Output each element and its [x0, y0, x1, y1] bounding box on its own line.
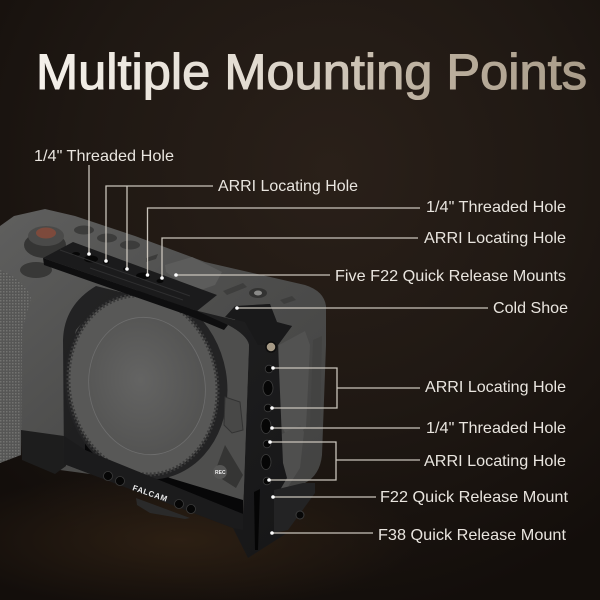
label: five F22 quick release mounts: Five F22 Quick Release Mounts — [335, 268, 566, 285]
hand grip — [0, 270, 31, 463]
REC button: REC — [215, 470, 226, 476]
label: F38 quick release mount: F38 Quick Release Mount — [378, 527, 567, 544]
side foot mount — [274, 483, 315, 533]
label: ARRI locating hole, top: ARRI Locating Hole — [218, 178, 358, 195]
bottom bar of cage — [64, 436, 243, 530]
label: ARRI locating hole, upper right: ARRI Locating Hole — [424, 230, 566, 247]
lens mount ring — [50, 277, 242, 493]
camera with cage — [0, 209, 326, 558]
FALCAM logo: FALCAM — [131, 483, 169, 504]
base plate — [21, 430, 66, 474]
lens cap gear — [54, 284, 232, 486]
side rail slots — [254, 489, 260, 550]
release tab — [224, 397, 243, 433]
bottom tab — [136, 498, 190, 519]
leader dots — [87, 252, 275, 535]
label: ARRI locating hole, side lower: ARRI Locating Hole — [424, 453, 566, 470]
label: 1/4 threaded hole, upper right: 1/4" Threaded Hole — [426, 199, 566, 216]
cage window backing — [74, 300, 249, 514]
cold shoe block — [225, 304, 292, 345]
leader lines — [89, 165, 488, 533]
side rail holes — [261, 365, 273, 485]
label: cold shoe: Cold Shoe — [493, 300, 568, 317]
camera top buttons — [74, 226, 158, 262]
side door panels — [278, 331, 310, 438]
title: Multiple Mounting Points — [36, 44, 587, 100]
camera top dial — [20, 226, 66, 278]
top rail plate — [43, 242, 228, 330]
hot shoe area — [165, 257, 222, 292]
label: F22 quick release mount: F22 Quick Release Mount — [380, 489, 569, 506]
side screw — [266, 342, 276, 352]
REC button — [213, 445, 243, 488]
bottom screw holes — [104, 472, 196, 514]
label: ARRI locating hole, side upper: ARRI Locating Hole — [425, 379, 566, 396]
label: 1/4 threaded hole, side: 1/4" Threaded Hole — [426, 420, 566, 437]
label: 1/4 threaded hole, top left: 1/4" Threaded Hole — [34, 148, 174, 165]
camera body — [0, 209, 326, 500]
lens cap disc — [78, 308, 216, 464]
black slit below lens — [85, 432, 243, 514]
cage frame — [63, 286, 292, 558]
